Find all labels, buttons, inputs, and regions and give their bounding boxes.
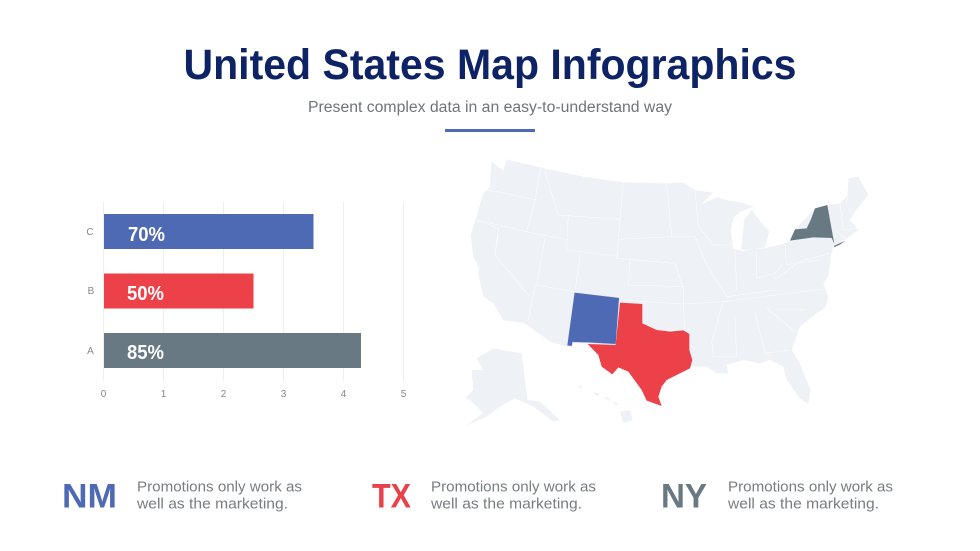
TX description: Promotions only work as <box>431 480 596 496</box>
NM label: NM <box>62 478 117 516</box>
NY description: Promotions only work as <box>728 480 893 496</box>
value axis labels: 4 <box>341 389 347 400</box>
value axis labels: 5 <box>401 389 407 400</box>
NY label: NY <box>661 478 707 516</box>
category labels: B <box>88 286 95 297</box>
bar B <box>104 274 254 308</box>
value axis labels: 3 <box>281 389 287 400</box>
contiguous states <box>471 159 868 406</box>
TX column <box>372 478 596 516</box>
value axis labels <box>101 389 407 400</box>
bar A <box>104 333 361 368</box>
bar A: 85% <box>127 342 164 364</box>
New Mexico <box>567 292 619 346</box>
US map <box>465 159 868 426</box>
TX label: TX <box>372 478 411 516</box>
value axis labels: 1 <box>161 389 167 400</box>
title: United States Map Infographics <box>184 41 796 89</box>
Texas <box>588 303 692 406</box>
bar B: 50% <box>127 283 164 305</box>
category labels: C <box>86 227 94 238</box>
title underline <box>445 129 535 132</box>
bar C: 70% <box>128 224 165 246</box>
bar chart <box>86 202 407 400</box>
category labels <box>86 227 95 357</box>
value axis labels: 0 <box>101 389 107 400</box>
category labels: A <box>87 346 94 357</box>
NM description: well as the marketing. <box>136 496 288 512</box>
TX description: well as the marketing. <box>430 496 582 512</box>
Hawaii <box>578 385 633 423</box>
value axis labels: 2 <box>221 389 227 400</box>
New York <box>790 205 845 247</box>
bar C <box>104 214 314 249</box>
Alaska <box>465 348 560 426</box>
NM description: Promotions only work as <box>137 480 302 496</box>
NY column <box>661 478 893 516</box>
NM column <box>62 478 302 516</box>
subtitle: Present complex data in an easy-to-understand way <box>308 99 672 116</box>
NY description: well as the marketing. <box>727 496 879 512</box>
state borders <box>477 167 858 357</box>
